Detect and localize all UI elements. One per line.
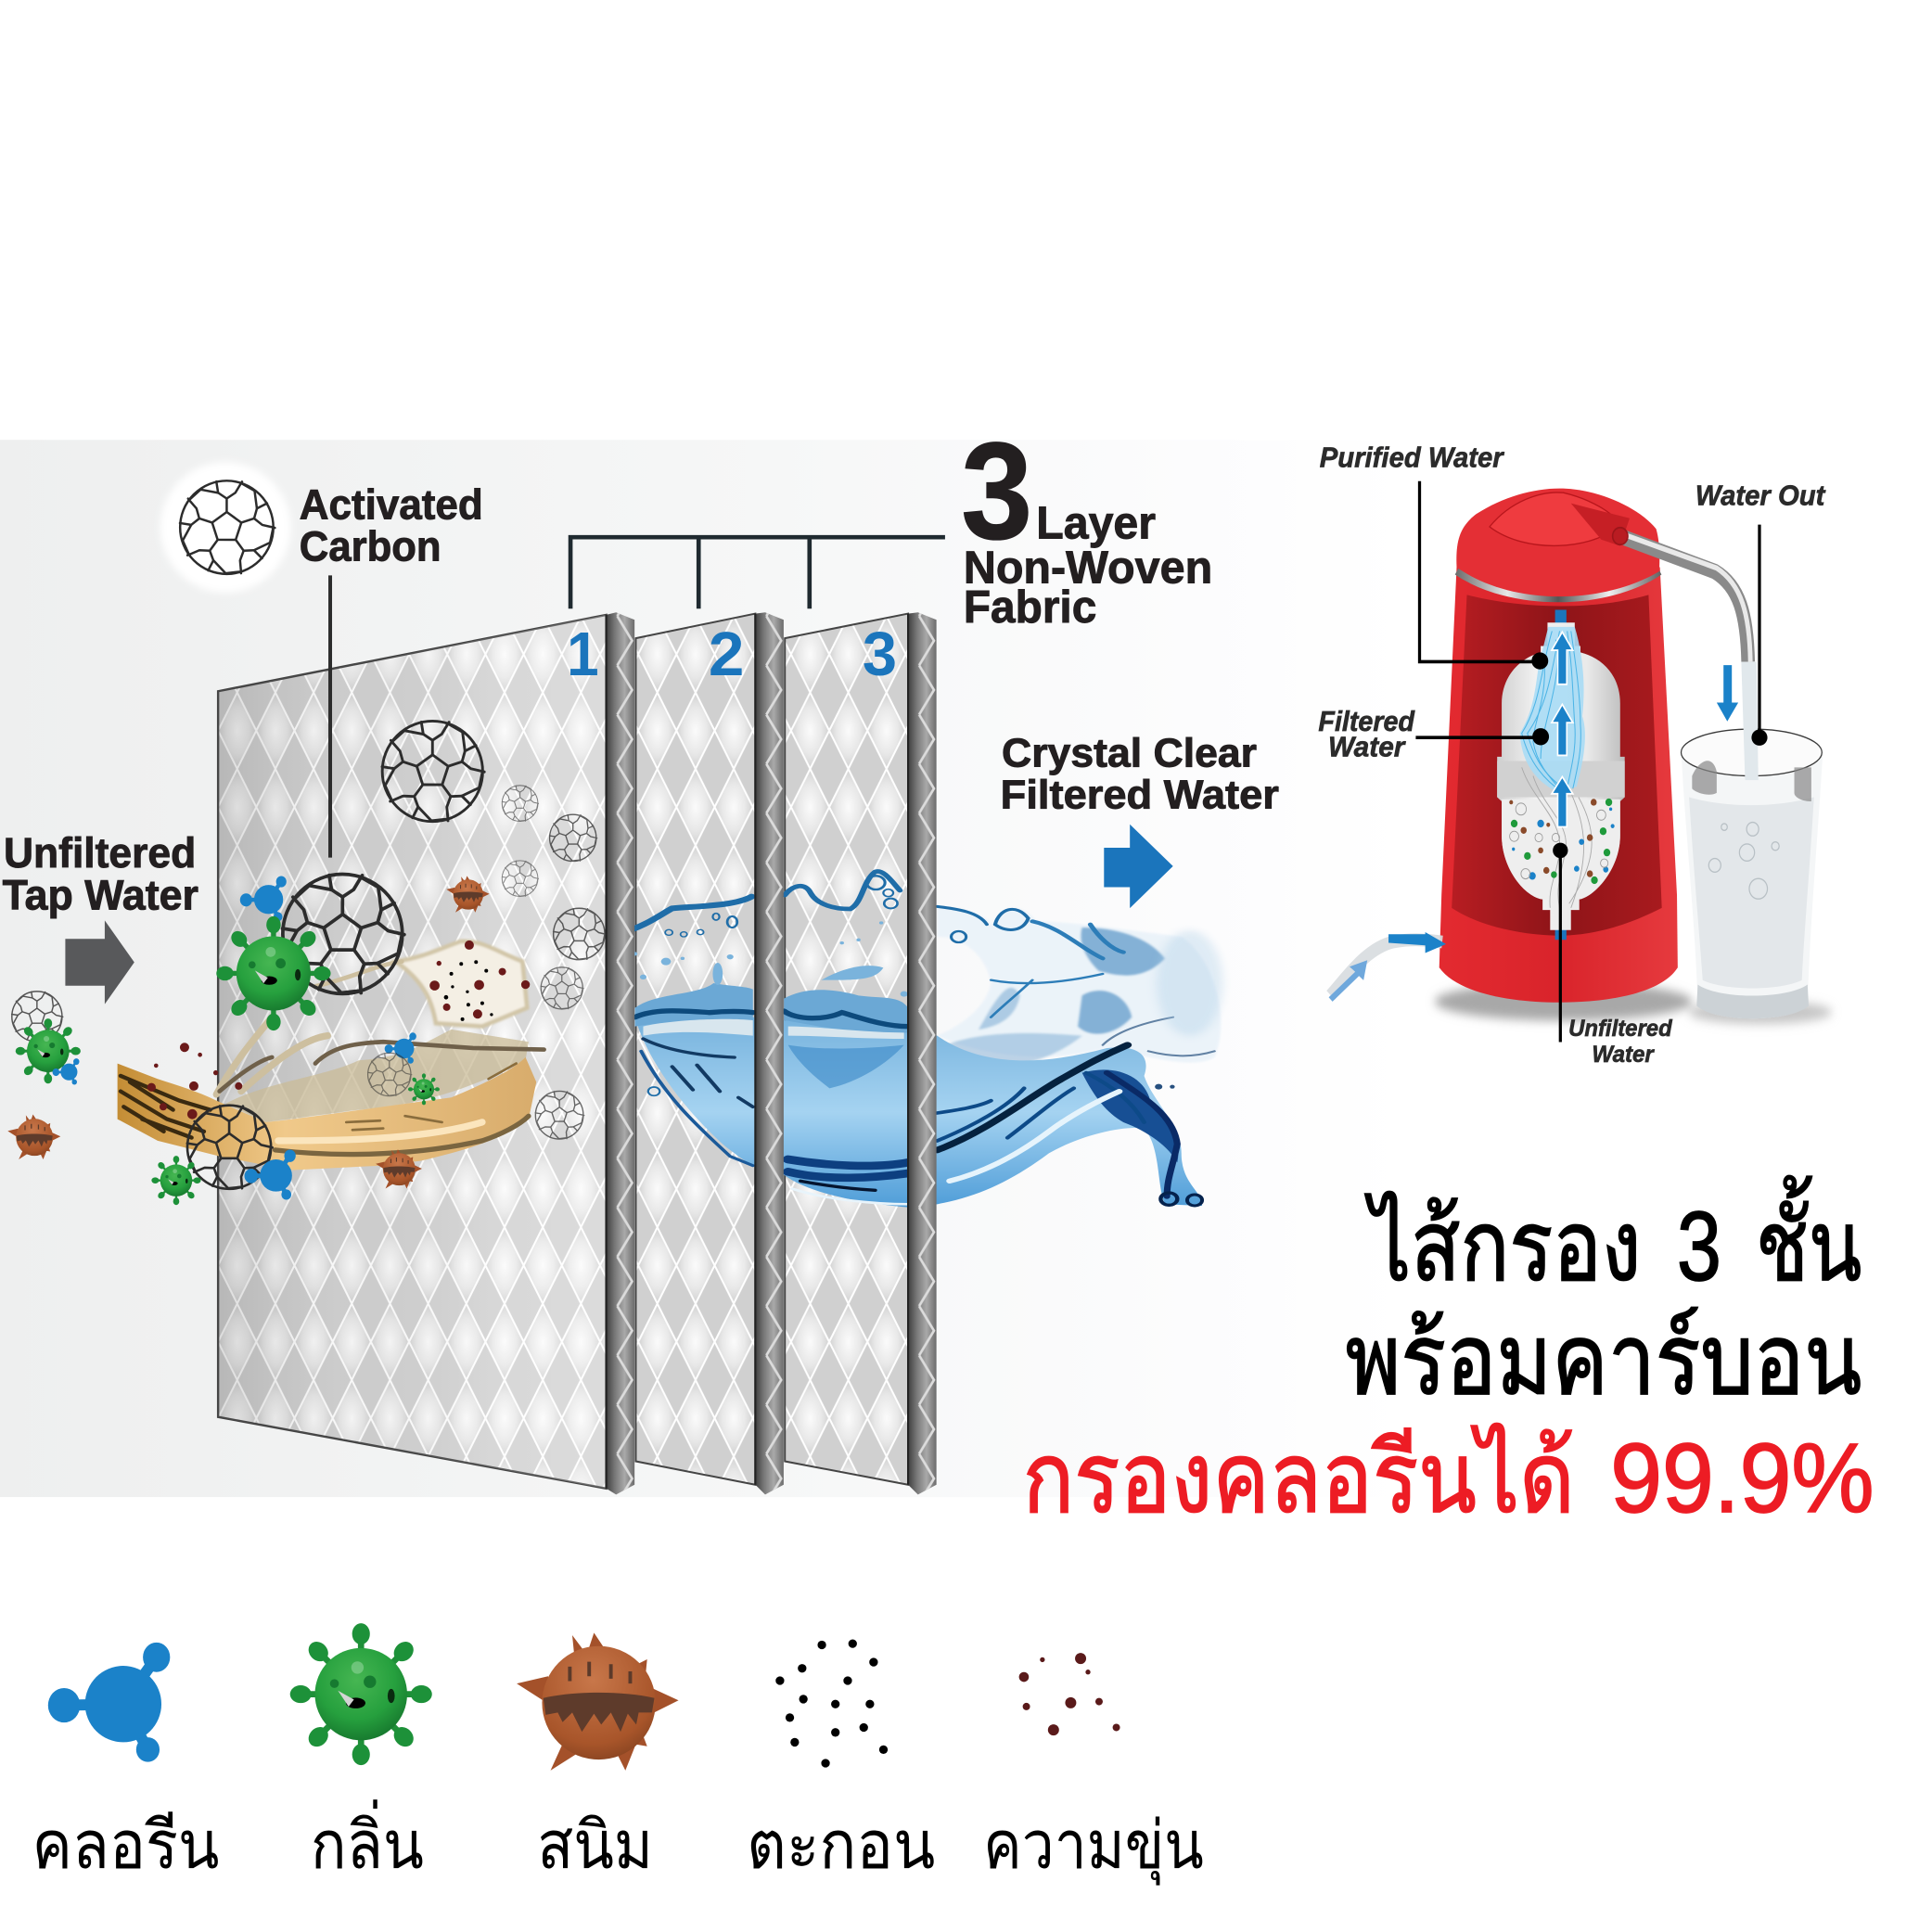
thai headline: กรองคลอรีนได้ <box>1023 1423 1575 1533</box>
purifier labels: Water <box>1592 1042 1655 1068</box>
crystal clear filtered water label <box>1001 730 1279 817</box>
filter layer 3 front <box>785 614 908 1485</box>
legend: chlorine <box>32 1643 219 1883</box>
layer numbers: 1 <box>567 621 599 689</box>
dirty water ribbon <box>118 940 544 1171</box>
shadows <box>1435 982 1832 1024</box>
thai headline: 3 <box>1677 1191 1721 1301</box>
glass of water <box>1682 661 1823 1018</box>
legend: rust: สนิม <box>537 1809 653 1883</box>
carbon balls on panel 1 <box>368 715 610 1146</box>
beige translucent water <box>225 1030 529 1122</box>
unfiltered tap water label: Tap Water <box>3 871 198 918</box>
right side foam <box>937 906 1221 1063</box>
spout <box>1613 528 1750 661</box>
unfiltered water swirl <box>1522 767 1592 908</box>
water purifier diagram <box>1329 481 1832 1042</box>
unfiltered tap water label: Unfiltered <box>4 829 196 876</box>
dark water lips and streaks <box>635 921 1214 1204</box>
legend: turbidity: ความขุ่น <box>983 1809 1204 1886</box>
arrow: unfiltered water in <box>65 920 134 1004</box>
clean water splash <box>629 871 1222 1208</box>
unfiltered tap water label <box>3 829 198 918</box>
internal flow arrows <box>1552 632 1573 827</box>
thai headline: ไส้กรอง <box>1364 1191 1641 1301</box>
purifier body <box>1439 489 1678 1003</box>
activated carbon icon <box>160 462 291 593</box>
legend: odor: กลิ่น <box>311 1799 424 1883</box>
heading: 3 layer non-woven fabric: Layer <box>1036 499 1156 549</box>
purifier labels: Purified Water <box>1320 441 1505 473</box>
layer numbers: 3 <box>863 621 897 689</box>
legend: turbidity <box>983 1653 1204 1886</box>
gold ribbon <box>118 1057 536 1171</box>
sediment specks <box>147 940 530 1120</box>
legend: chlorine: คลอรีน <box>32 1809 219 1883</box>
dark mass at lower right <box>1082 1069 1178 1162</box>
foam mid tones <box>945 928 1165 1071</box>
clean water swirl <box>1520 627 1585 793</box>
upper band of water <box>635 983 908 1033</box>
purifier labels: Unfiltered <box>1568 1016 1672 1042</box>
heading: 3 layer non-woven fabric: Fabric <box>964 582 1096 633</box>
filter layer 3 edge <box>908 612 937 1494</box>
crystal clear filtered water label: Filtered Water <box>1001 772 1279 817</box>
legend: odor <box>290 1623 432 1883</box>
heading: 3 layer non-woven fabric <box>961 414 1212 633</box>
thai headline <box>1023 1175 1874 1533</box>
layer numbers <box>567 621 897 689</box>
legend: rust <box>517 1632 679 1883</box>
filter layer 2 edge <box>755 612 784 1494</box>
filter layer 2 front <box>635 614 755 1485</box>
legend: sediment: ตะกอน <box>747 1809 935 1883</box>
callout lines <box>1415 481 1560 1042</box>
inlet tube with arrows <box>1329 932 1446 1002</box>
purifier labels: Water Out <box>1695 480 1826 512</box>
upper foam <box>396 941 527 1027</box>
bracket connecting the three layers <box>570 537 945 608</box>
crystal clear filtered water label: Crystal Clear <box>1002 730 1257 775</box>
thai headline: 99.9% <box>1610 1423 1874 1533</box>
filter cartridge <box>1497 609 1625 940</box>
purifier labels: Filtered <box>1318 706 1415 737</box>
background panel <box>0 440 1404 1497</box>
purifier labels <box>1318 441 1826 1068</box>
swoops rising from ribbon <box>216 962 544 1094</box>
purifier labels: Water <box>1328 732 1406 763</box>
layer numbers: 2 <box>709 621 744 689</box>
thai headline: ชั้น <box>1756 1175 1862 1301</box>
callout dots <box>1531 652 1768 858</box>
main water body <box>637 1016 1202 1208</box>
heading: 3 layer non-woven fabric: Non-Woven <box>964 543 1212 593</box>
arrow: filtered water out <box>1104 825 1173 908</box>
legend: sediment <box>747 1639 935 1883</box>
heading: 3 layer non-woven fabric: 3 <box>961 414 1032 569</box>
ribbon dark grain <box>121 1064 529 1155</box>
arrow: down into glass <box>1717 665 1738 722</box>
water highlights <box>643 1019 904 1039</box>
activated carbon label: Activated <box>300 480 483 528</box>
central shadow in panel 3 <box>788 1045 904 1088</box>
rim of splash <box>629 871 1202 1206</box>
contaminants on panel 1 <box>151 866 490 1205</box>
splash droplets <box>633 921 1175 1090</box>
leader line from activated carbon <box>329 575 332 858</box>
activated carbon label: Carbon <box>300 522 441 569</box>
incoming contaminants <box>5 988 81 1159</box>
filter layer 1 <box>218 612 634 1494</box>
contaminant specks in cartridge <box>1509 799 1615 884</box>
right side water fade <box>1157 930 1222 1036</box>
activated carbon label <box>300 480 483 569</box>
water out callout line <box>1756 525 1763 737</box>
